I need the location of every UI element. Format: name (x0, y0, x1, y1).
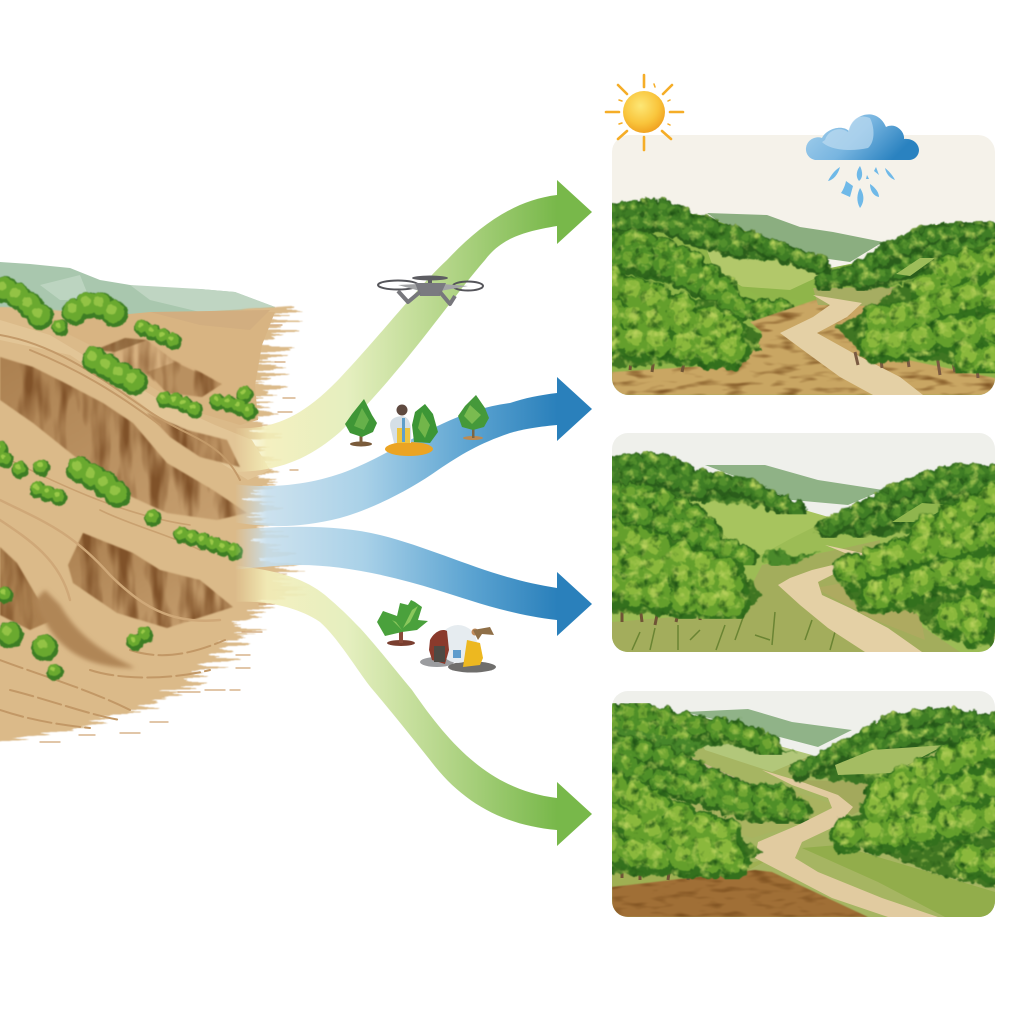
ploughed field (612, 870, 868, 917)
arrow: blue upper (232, 377, 592, 526)
forest front right (835, 485, 995, 648)
mound erosion (95, 338, 222, 397)
icon: sapling (377, 600, 428, 646)
shrubs on the cliff (0, 286, 255, 674)
forest upper left (610, 453, 805, 512)
hillside backdrop (612, 205, 995, 395)
strata lines and gullies (0, 335, 240, 728)
trunks (622, 860, 738, 880)
forest upper left (610, 705, 798, 753)
river (778, 545, 922, 652)
icon: farmers and equipment (420, 625, 496, 672)
arrow: blue lower (232, 527, 592, 636)
middle slope grass (736, 284, 742, 286)
forest back right (788, 708, 995, 785)
tan slope (675, 750, 752, 785)
panel: landscape 2 (609, 433, 995, 652)
river (755, 770, 938, 917)
valley floor (798, 780, 878, 815)
rain drops (828, 166, 895, 208)
upper terrace soil (0, 310, 275, 480)
forest front right (837, 240, 995, 378)
valley shrub cluster (760, 548, 820, 565)
cliff face lower (68, 533, 233, 628)
hillside patch (835, 745, 945, 775)
sky (612, 135, 995, 268)
panel: landscape 1 (609, 135, 995, 395)
forest front left (609, 517, 762, 625)
far slope grass (704, 744, 812, 772)
grass strip under trees (612, 858, 772, 887)
panel: landscape 3 (609, 691, 995, 917)
forest middle left (610, 230, 800, 322)
sky (612, 433, 995, 516)
icon: rain cloud (806, 114, 919, 208)
lower slope grass (680, 790, 835, 838)
forest back right (815, 463, 995, 535)
eroded cliff landscape (0, 262, 298, 748)
sky (612, 691, 995, 756)
forest middle left (610, 482, 755, 562)
forest upper left (610, 199, 827, 272)
valley meadow (813, 287, 897, 306)
river (780, 295, 923, 395)
trunks (628, 363, 685, 372)
icon: sun (606, 75, 683, 150)
distant hill (707, 213, 883, 262)
hillside backdrop (612, 496, 995, 652)
sprouts on meadow (632, 612, 835, 650)
frayed sand ground (0, 306, 294, 748)
arrow: green lower (232, 565, 592, 846)
cliff face far left (0, 547, 53, 630)
forest front left (609, 772, 762, 880)
distant hills (0, 262, 275, 325)
right meadow (802, 845, 995, 917)
valley ground (612, 287, 995, 395)
far slope grass (707, 250, 832, 290)
trunks (620, 612, 744, 626)
arrow: green upper (232, 180, 592, 472)
meadow ground (612, 540, 960, 652)
forest middle left (610, 725, 812, 820)
sediment streaks (40, 325, 298, 742)
cliff face upper (0, 357, 247, 520)
icon: worker and tree on yellow base (385, 404, 438, 456)
cliff face right (147, 413, 240, 467)
icon: tree left of worker (345, 399, 377, 446)
distant hill (705, 465, 883, 505)
far slope grass (692, 501, 829, 555)
hillside backdrop (612, 708, 995, 917)
gully shadow (35, 590, 135, 668)
distant hill (685, 709, 852, 747)
icon: drone (378, 276, 483, 304)
hillside patch (892, 503, 952, 522)
trunks (854, 352, 980, 378)
forest front left (609, 267, 760, 372)
right bank meadow (820, 584, 924, 640)
forest back right (813, 222, 995, 288)
forest front right (828, 735, 995, 888)
icon: tree right of worker (458, 395, 489, 440)
hillside patch (896, 258, 935, 276)
